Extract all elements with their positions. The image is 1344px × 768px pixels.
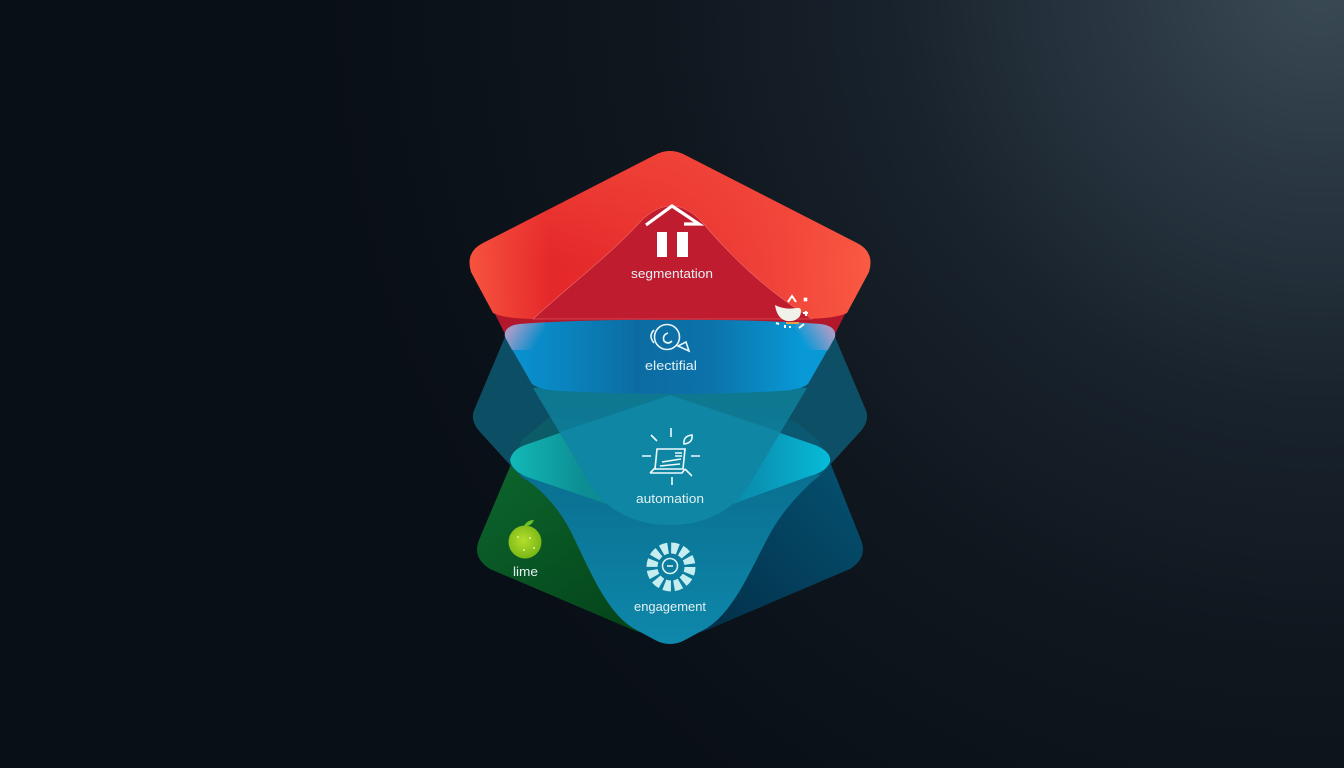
heading: lime: lime xyxy=(513,564,538,579)
panel: navy lower-right layer xyxy=(670,420,863,642)
icon: magnifier face xyxy=(651,324,689,351)
band body xyxy=(505,320,835,394)
lavender left corner xyxy=(505,322,545,350)
panel: lime green lower-left layer xyxy=(477,417,670,642)
icon: lime fruit xyxy=(508,520,542,558)
red top sheen xyxy=(470,151,870,260)
heading: automation: automation xyxy=(636,491,704,506)
icon: house xyxy=(646,206,699,257)
icon: engagement wheel xyxy=(652,548,690,586)
heading: segmentation: segmentation xyxy=(631,267,713,281)
heading: engagement: engagement xyxy=(634,599,706,614)
dark red lower strip xyxy=(493,310,847,338)
panel: engagement layer xyxy=(520,440,820,644)
panel: blue electrical band xyxy=(505,320,835,394)
heading: electifial: electifial xyxy=(645,359,697,373)
panel: translucent middle layer xyxy=(473,337,867,560)
icon: laptop with rays and leaf xyxy=(642,428,700,485)
icon: small cup with sparkles xyxy=(775,296,808,328)
red pentagon xyxy=(470,151,870,319)
panel: funnel overlay xyxy=(533,378,807,525)
panel: red segmentation layer xyxy=(470,151,870,338)
inner dark red peak xyxy=(533,206,812,319)
panel: automation diamond top xyxy=(560,395,780,525)
lavender right corner xyxy=(795,322,835,350)
panel: automation diamond xyxy=(510,395,830,515)
